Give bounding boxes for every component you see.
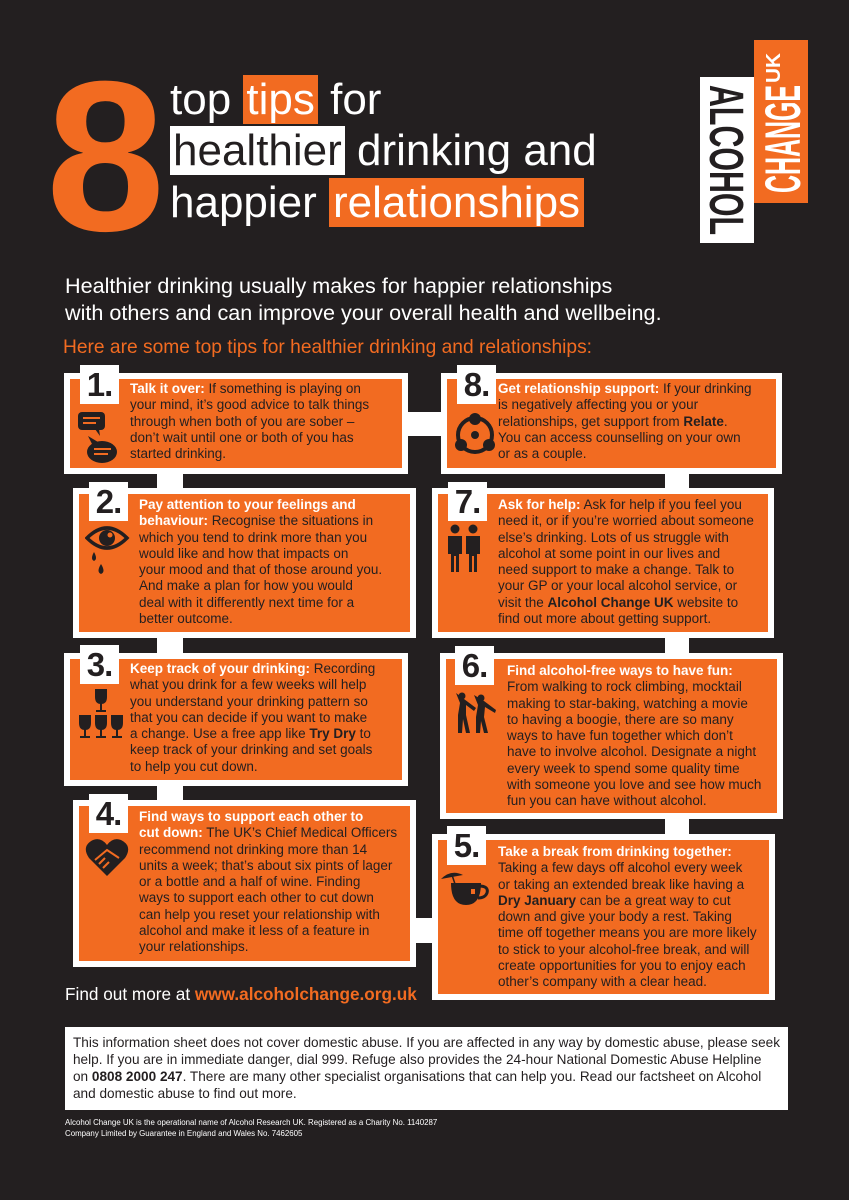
disclaimer box: and domestic abuse to find out more. bbox=[73, 1086, 297, 1101]
text 7: alcohol at some point in our lives and bbox=[498, 546, 720, 561]
title text: top tips for bbox=[170, 75, 381, 124]
text 4: ways to support each other to cut down bbox=[139, 890, 374, 905]
footer: Alcohol Change UK is the operational name of Alcohol Research UK. Registered as a Charity No. 1140287 bbox=[65, 1118, 437, 1127]
text 2: which you tend to drink more than you bbox=[139, 530, 367, 545]
number 6 bbox=[455, 646, 494, 685]
panel 4 bbox=[73, 800, 416, 967]
text 6: making to star-baking, watching a movie bbox=[507, 696, 748, 711]
number 5 bbox=[447, 826, 486, 865]
text 2: behaviour: Recognise the situations in bbox=[139, 513, 373, 528]
text 3: Keep track of your drinking: Recording bbox=[130, 661, 375, 676]
text 7: Ask for help: Ask for help if you feel you bbox=[498, 497, 742, 512]
text 7: need it, or if you’re worried about someone bbox=[498, 513, 754, 528]
text 7: find out more about getting support. bbox=[498, 611, 711, 626]
icon: heart handshake bbox=[86, 839, 128, 876]
text 6: From walking to rock climbing, mocktail bbox=[507, 679, 742, 694]
text 2 bbox=[139, 497, 382, 626]
logo bbox=[700, 40, 808, 243]
subtitle: Here are some top tips for healthier drinking and relationships: bbox=[63, 337, 592, 358]
intro text: Healthier drinking usually makes for happier relationships bbox=[65, 273, 612, 298]
title text bbox=[170, 75, 597, 227]
connectors bbox=[157, 470, 183, 810]
number 1 bbox=[80, 365, 119, 404]
intro text: with others and can improve your overall health and wellbeing. bbox=[65, 300, 662, 325]
icon: two people bbox=[448, 524, 480, 572]
text 5: or taking an extended break like having a bbox=[498, 877, 744, 892]
panel 5 bbox=[432, 834, 775, 1000]
text 1: your mind, it’s good advice to talk things bbox=[130, 397, 369, 412]
text 2: better outcome. bbox=[139, 611, 233, 626]
title text: healthier drinking and bbox=[173, 126, 597, 175]
text 6: fun you can have without alcohol. bbox=[507, 793, 707, 808]
text 3: to help you cut down. bbox=[130, 759, 258, 774]
find out more: Find out more at www.alcoholchange.org.uk bbox=[65, 984, 417, 1004]
text 6: have to involve alcohol. Designate a night bbox=[507, 744, 756, 759]
text 6: with someone you love and see how much bbox=[507, 777, 761, 792]
text 7: visit the Alcohol Change UK website to bbox=[498, 595, 738, 610]
text 2: Pay attention to your feelings and bbox=[139, 497, 356, 512]
footer: Company Limited by Guarantee in England and Wales No. 7462605 bbox=[65, 1129, 302, 1138]
text 4: recommend not drinking more than 14 bbox=[139, 842, 367, 857]
text 8: or as a couple. bbox=[498, 446, 587, 461]
number 6: 6. bbox=[462, 647, 487, 684]
text 4 bbox=[139, 809, 397, 954]
panel 8 bbox=[441, 373, 782, 474]
number 2 bbox=[89, 482, 128, 521]
text 8 bbox=[498, 381, 752, 461]
number 2: 2. bbox=[96, 483, 121, 520]
number 3 bbox=[80, 645, 119, 684]
text 8: You can access counselling on your own bbox=[498, 430, 741, 445]
panel 7 bbox=[432, 488, 774, 638]
text 7: need support to make a change. Talk to bbox=[498, 562, 734, 577]
number 7: 7. bbox=[455, 483, 480, 520]
text 5: other’s company with a clear head. bbox=[498, 974, 707, 989]
text 1: Talk it over: If something is playing on bbox=[130, 381, 361, 396]
text 5: Dry January can be a great way to cut bbox=[498, 893, 731, 908]
icon: support circle bbox=[455, 413, 495, 454]
text 8: is negatively affecting you or your bbox=[498, 397, 698, 412]
number 4 bbox=[89, 794, 128, 833]
panel 2 bbox=[73, 488, 416, 638]
icon: eye with tears bbox=[85, 526, 130, 574]
panel 1 bbox=[64, 373, 408, 474]
text 3 bbox=[130, 661, 375, 774]
text 3: keep track of your drinking and set goals bbox=[130, 742, 372, 757]
icon: speech bubbles bbox=[78, 412, 117, 463]
text 3: that you can decide if you want to make bbox=[130, 710, 367, 725]
logo: UK bbox=[763, 52, 785, 83]
footer bbox=[65, 1118, 437, 1138]
text 3: a change. Use a free app like Try Dry to bbox=[130, 726, 371, 741]
disclaimer box: on 0808 2000 247. There are many other specialist organisations that can help you. Read our factsheet on Alcohol bbox=[73, 1069, 761, 1084]
text 5: Take a break from drinking together: bbox=[498, 844, 732, 859]
icon: dancing people bbox=[456, 692, 496, 733]
text 8: relationships, get support from Relate. bbox=[498, 414, 728, 429]
text 2: your mood and that of those around you. bbox=[139, 562, 382, 577]
text 1 bbox=[130, 381, 369, 461]
text 4: your relationships. bbox=[139, 939, 249, 954]
number 7 bbox=[448, 482, 487, 521]
text 7: else’s drinking. Lots of us struggle with bbox=[498, 530, 729, 545]
text 6: every week to spend some quality time bbox=[507, 761, 740, 776]
text 6: ways to have fun together which don’t bbox=[507, 728, 733, 743]
text 1: don’t wait until one or both of you has bbox=[130, 430, 354, 445]
text 5 bbox=[498, 844, 757, 989]
text 4: can help you reset your relationship with bbox=[139, 907, 380, 922]
text 2: would like and how that impacts on bbox=[139, 546, 348, 561]
text 5: Taking a few days off alcohol every week bbox=[498, 860, 742, 875]
disclaimer box: help. If you are in immediate danger, dial 999. Refuge also provides the 24-hour National Domestic Abuse Helpline bbox=[73, 1052, 761, 1067]
title: big 8: 8 bbox=[46, 37, 161, 276]
text 1: through when both of you are sober – bbox=[130, 414, 354, 429]
text 6: to having a boogie, there are so many bbox=[507, 712, 734, 727]
number 4: 4. bbox=[96, 795, 121, 832]
text 4: alcohol and make it less of a feature in bbox=[139, 923, 369, 938]
intro text bbox=[65, 273, 662, 325]
icon: wine glasses bbox=[79, 689, 123, 738]
panel 3 bbox=[64, 653, 408, 786]
text 4: Find ways to support each other to bbox=[139, 809, 363, 824]
panel 6 bbox=[440, 653, 783, 819]
text 2: deal with it differently next time for a bbox=[139, 595, 354, 610]
text 6: Find alcohol-free ways to have fun: bbox=[507, 663, 733, 678]
title text: happier relationships bbox=[170, 178, 580, 227]
text 1: started drinking. bbox=[130, 446, 226, 461]
number 8 bbox=[457, 365, 496, 404]
disclaimer box: This information sheet does not cover domestic abuse. If you are affected in any way by domestic abuse, please seek bbox=[73, 1035, 780, 1050]
text 4: units a week; that’s about six pints of lager bbox=[139, 858, 392, 873]
text 6 bbox=[507, 663, 761, 808]
disclaimer box bbox=[65, 1027, 788, 1110]
text 8: Get relationship support: If your drinking bbox=[498, 381, 752, 396]
number 5: 5. bbox=[454, 827, 479, 864]
text 5: create opportunities for you to enjoy each bbox=[498, 958, 746, 973]
text 4: cut down: The UK’s Chief Medical Officers bbox=[139, 825, 397, 840]
text 2: And make a plan for how you would bbox=[139, 578, 353, 593]
text 5: time off together means you are more likely bbox=[498, 925, 757, 940]
text 7 bbox=[498, 497, 754, 626]
text 3: what you drink for a few weeks will help bbox=[130, 677, 366, 692]
number 3: 3. bbox=[87, 646, 112, 683]
icon: cup with umbrella bbox=[441, 872, 489, 905]
number 1: 1. bbox=[87, 366, 112, 403]
text 4: or a bottle and a half of wine. Finding bbox=[139, 874, 360, 889]
text 5: down and give your body a rest. Taking bbox=[498, 909, 732, 924]
text 5: to stick to your alcohol-free break, and will bbox=[498, 942, 749, 957]
text 7: your GP or your local alcohol service, or bbox=[498, 578, 737, 593]
number 8: 8. bbox=[464, 366, 489, 403]
text 3: you understand your drinking pattern so bbox=[130, 694, 368, 709]
